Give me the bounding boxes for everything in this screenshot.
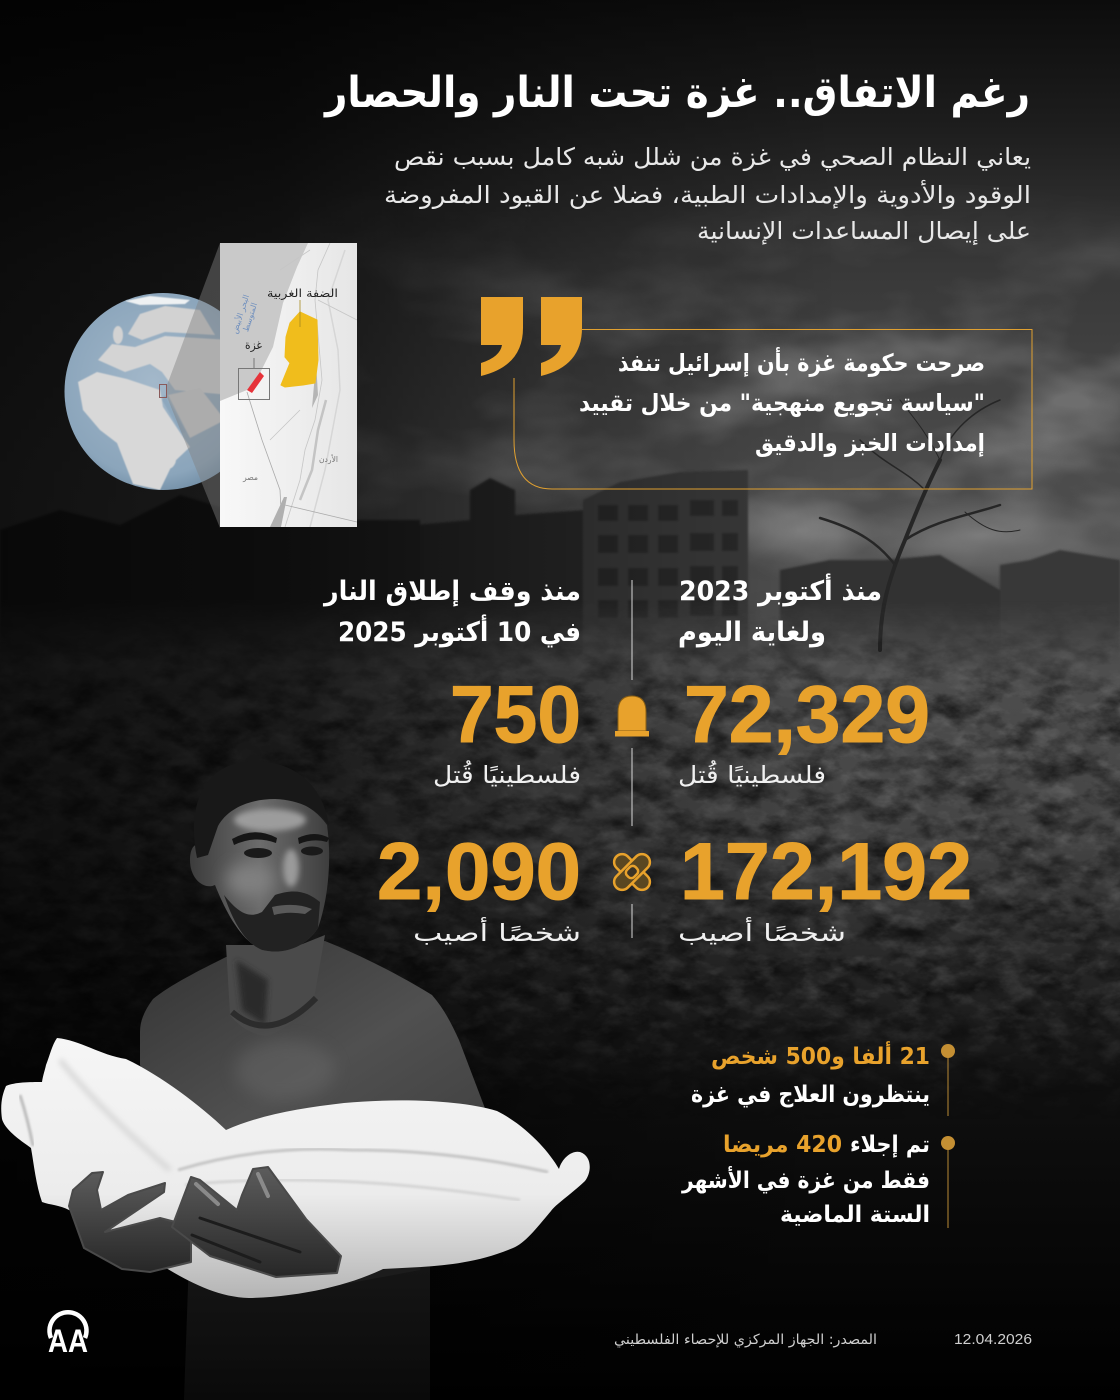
timeline bullet 1: awaiting treatment bbox=[691, 1040, 955, 1116]
West Bank bbox=[281, 312, 318, 387]
column heading: since ceasefire: في 10 أكتوبر 2025 bbox=[338, 614, 581, 648]
tree bbox=[820, 400, 1020, 650]
map panel: غزة bbox=[245, 338, 262, 353]
timeline bullet 2: evacuated patients: الستة الماضية bbox=[780, 1202, 930, 1228]
neck bbox=[226, 935, 325, 1036]
hands bbox=[69, 1167, 341, 1277]
icon: tombstone bbox=[615, 696, 649, 736]
map panel: الأردن bbox=[319, 454, 338, 464]
shirt bbox=[140, 941, 490, 1160]
intro text block bbox=[384, 143, 1031, 246]
beard bbox=[224, 891, 320, 952]
intro text block: على إيصال المساعدات الإنسانية bbox=[697, 217, 1031, 246]
icon: bandage bbox=[611, 851, 653, 893]
quote marks bbox=[481, 297, 582, 376]
map panel: البحر الأبيض bbox=[229, 293, 251, 335]
quote text: إمدادات الخبز والدقيق bbox=[755, 429, 985, 457]
source: المصدر: الجهاز المركزي للإحصاء الفلسطيني bbox=[614, 1332, 877, 1348]
man carrying shrouded child bbox=[1, 761, 590, 1400]
map panel bbox=[220, 243, 357, 527]
zoom wedge bbox=[167, 243, 220, 528]
timeline bullet 2: evacuated patients bbox=[681, 1132, 955, 1228]
lower torso bbox=[184, 1210, 430, 1400]
column heading: since October 2023: منذ أكتوبر 2023 bbox=[679, 573, 882, 607]
quote text: "سياسة تجويع منهجية" من خلال تقييد bbox=[579, 389, 985, 417]
intro text block: يعاني النظام الصحي في غزة من شلل شبه كامل بسبب نقص bbox=[394, 143, 1031, 171]
map panel: المتوسط bbox=[241, 302, 259, 333]
timeline bullet 1: awaiting treatment: ينتظرون العلاج في غزة bbox=[691, 1082, 930, 1108]
locator map: globe and zoomed map bbox=[64, 243, 357, 528]
date: 12.04.2026 bbox=[954, 1332, 1032, 1348]
globe bbox=[64, 293, 220, 490]
divider bbox=[631, 580, 633, 938]
AA logo: AA bbox=[48, 1323, 88, 1359]
stat: killed since ceasefire: فلسطينيًا قُتل bbox=[433, 759, 581, 789]
stat: killed since ceasefire: 750 bbox=[450, 670, 581, 760]
shrouded child bbox=[1, 1038, 590, 1298]
column heading: since ceasefire: منذ وقف إطلاق النار bbox=[322, 576, 581, 607]
stat: killed since October 2023: فلسطينيًا قُتل bbox=[678, 759, 826, 789]
AA logo bbox=[48, 1312, 88, 1359]
stat: injured since October 2023: 172,192 bbox=[680, 827, 972, 917]
column heading: since October 2023: ولغاية اليوم bbox=[678, 617, 826, 648]
stat: injured since October 2023: شخصًا أصيب bbox=[678, 917, 846, 947]
map labels: الضفة الغربية bbox=[267, 286, 338, 301]
shirt neckline and sleeve shading bbox=[232, 998, 316, 1026]
arm behind child bbox=[325, 1235, 430, 1285]
title: رغم الاتفاق.. غزة تحت النار والحصار bbox=[323, 68, 1030, 118]
timeline bullet 2: evacuated patients: فقط من غزة في الأشهر bbox=[681, 1165, 930, 1194]
column heading: since ceasefire bbox=[322, 576, 581, 648]
column heading: since October 2023 bbox=[678, 573, 882, 648]
forehead and cheek light bbox=[234, 809, 306, 831]
stat: injured since ceasefire: 2,090 bbox=[377, 827, 581, 917]
timeline bullet 2: evacuated patients: تم إجلاء bbox=[850, 1132, 930, 1158]
stat: killed since October 2023: 72,329 bbox=[684, 670, 930, 760]
head bbox=[190, 761, 329, 952]
timeline bullet 1: awaiting treatment: 21 ألفا و500 شخص bbox=[711, 1040, 930, 1070]
buildings silhouette bbox=[1, 470, 1120, 648]
map panel: مصر bbox=[242, 473, 258, 482]
intro text block: الوقود والأدوية والإمدادات الطبية، فضلا عن القيود المفروضة bbox=[384, 180, 1031, 209]
quote text bbox=[579, 347, 985, 457]
brows and eyes bbox=[232, 832, 277, 845]
stat: killed since ceasefire bbox=[433, 670, 581, 789]
hair bbox=[194, 761, 329, 858]
quote text: صرحت حكومة غزة بأن إسرائيل تنفذ bbox=[618, 347, 985, 377]
Gaza bbox=[247, 372, 264, 393]
timeline bullet 2: evacuated patients: 420 مريضا bbox=[723, 1132, 842, 1158]
quote box bbox=[481, 297, 1032, 489]
stat: injured since ceasefire: شخصًا أصيب bbox=[413, 917, 581, 947]
